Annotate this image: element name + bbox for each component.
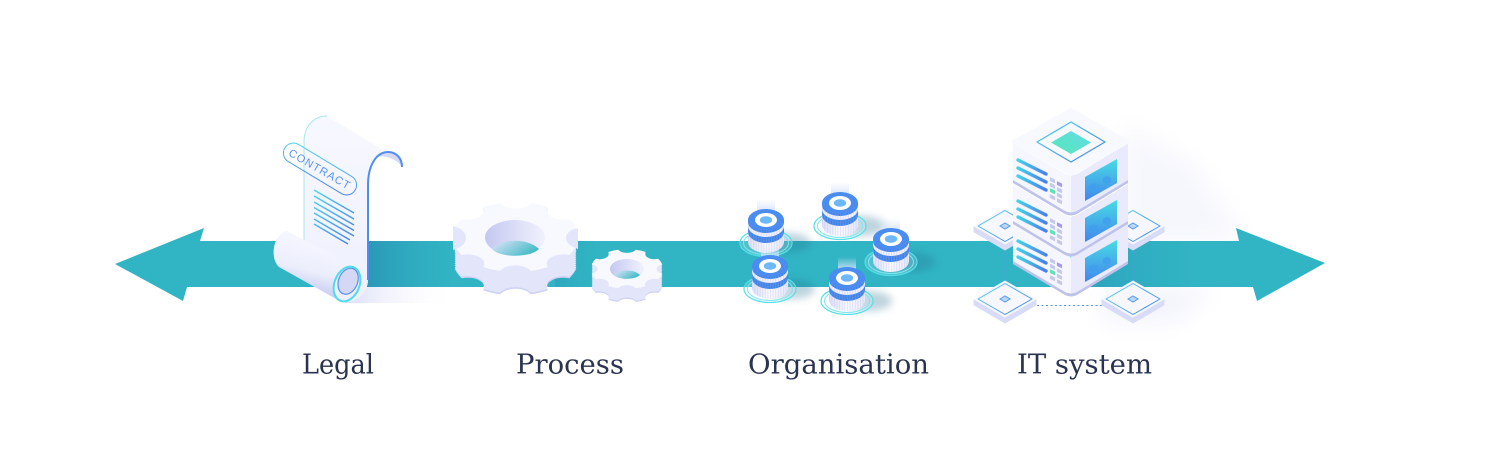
- curl underside: [376, 152, 402, 167]
- contract label text: CONTRACT: [286, 147, 353, 193]
- curl edge: [368, 152, 402, 280]
- double-headed teal arrow: [115, 228, 1325, 301]
- text lines: [314, 190, 354, 244]
- gear shadow: [555, 241, 615, 287]
- server unit middle: [1013, 184, 1128, 257]
- scroll paper: [304, 116, 385, 302]
- top plate green panel: [1051, 131, 1091, 154]
- label: Legal: Legal: [302, 350, 374, 380]
- icon: server network: [974, 110, 1164, 323]
- label: Organisation: Organisation: [748, 350, 929, 380]
- network links: [1005, 252, 1134, 306]
- server shadow: [1075, 241, 1235, 287]
- small gear hole: [610, 259, 644, 279]
- scroll roll: [274, 231, 358, 300]
- node upper right: [1102, 208, 1164, 250]
- top plate outline: [1037, 122, 1105, 162]
- background shadow behind server: [1100, 125, 1245, 322]
- icon: coin stack 3: [865, 218, 936, 276]
- icon: coin stack 2: [814, 182, 885, 240]
- gear hole: [485, 220, 545, 255]
- node upper left: [974, 208, 1036, 250]
- icon: small gear: [592, 250, 662, 302]
- icon: coin stack 4: [744, 245, 815, 302]
- icon: large gear: [453, 203, 578, 294]
- label: IT system: IT system: [1017, 350, 1152, 380]
- icon: coin stack 1: [740, 199, 811, 256]
- server unit bottom: [1013, 224, 1128, 297]
- roll opening: [329, 263, 365, 305]
- server top face: [1014, 110, 1127, 174]
- node lower right: [1102, 281, 1164, 323]
- paper left edge: [304, 116, 327, 240]
- label: Process: Process: [516, 350, 624, 380]
- server unit top: [1013, 143, 1128, 216]
- gear side notches: [453, 226, 578, 250]
- icon: contract scroll: [274, 116, 402, 305]
- node lower left: [974, 281, 1036, 323]
- icon: coin stack 5: [821, 257, 892, 314]
- contract label pill: [280, 139, 360, 199]
- legal shadow: [345, 241, 476, 303]
